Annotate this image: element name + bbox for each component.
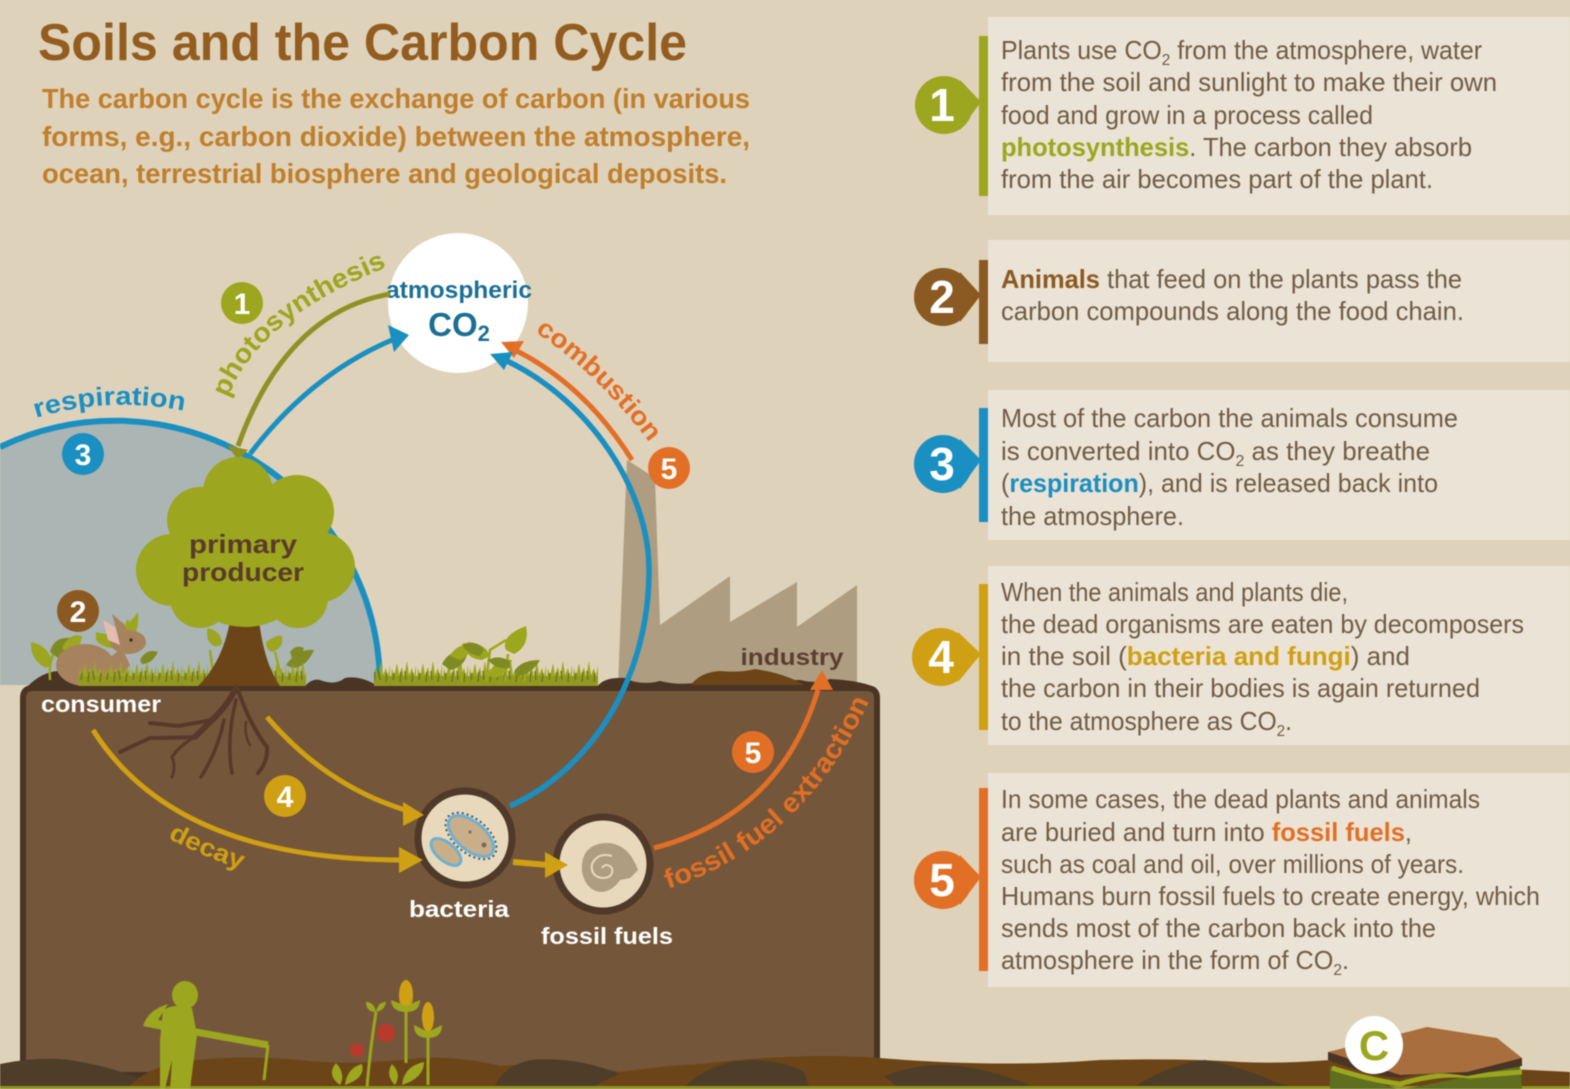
small badge 5 combustion [648,447,690,489]
badge 5 [914,851,981,909]
grass right [374,658,598,686]
text 1: photosynthesis. The carbon they absorb [1001,132,1472,162]
text 5: 2 [1333,962,1342,979]
label: photosynthesis: photosynthesis [215,255,386,399]
small badge 5 combustion: 5 [661,453,677,486]
text 3: (respiration), and is released back into [1001,468,1438,498]
arrow: decay upper [267,717,424,826]
badge 3: 3 [929,438,955,490]
icon: bacteria [418,791,512,885]
text 1: food and grow in a process called [1001,100,1373,130]
small badge 4 [264,775,306,817]
text 3: the atmosphere. [1001,501,1184,531]
icon: soil C block [1328,1016,1522,1089]
arrow: combustion [501,341,632,460]
small badge 1 [221,282,263,324]
intro text: ocean, terrestrial biosphere and geological deposits. [42,158,727,189]
icon: farmer [143,981,268,1089]
panel 2: animals [914,240,1570,362]
text 4: the dead organisms are eaten by decomposers [1001,609,1524,639]
text 4: to the atmosphere as CO [1001,706,1291,736]
arrow: fossil fuel extraction [654,670,833,848]
text 3: Most of the carbon the animals consume [1001,403,1458,433]
text 5: sends most of the carbon back into the [1001,913,1436,943]
text 4: When the animals and plants die, [1001,577,1348,607]
icon: crops [332,980,442,1087]
small badge 5 extraction: 5 [745,737,761,770]
text 5 [1001,784,1540,979]
icon: roots [120,688,267,777]
arrow: plant respiration to atmosphere [250,325,409,454]
icon: tree primary producer: producer [182,557,304,587]
atmospheric CO2 circle [386,233,532,373]
small badge 3 [62,433,104,475]
badge 1 [915,76,981,134]
small badge 5 extraction [732,731,774,773]
title: Soils and the Carbon Cycle [38,14,687,72]
panel 4: decay [912,566,1570,745]
text 3: as they breathe [1244,436,1430,466]
badge 3 [914,435,981,493]
panel 3: respiration [914,390,1570,540]
grass left [78,658,306,686]
text 1: from the air becomes part of the plant. [1001,164,1433,194]
badge 5: 5 [929,854,955,906]
text 1: 2 [1162,52,1170,69]
small badge 1: 1 [234,288,250,321]
icon: tree primary producer: primary [189,529,298,559]
icon: rabbit consumer [56,614,146,686]
text 5: . [1342,945,1349,975]
arrow: bacteria respiration to atmosphere [490,352,649,806]
label: industry: industry [740,644,844,670]
text 2: Animals that feed on the plants pass the [1001,264,1462,294]
small badge 2: 2 [70,596,86,629]
badge 1: 1 [929,79,955,131]
factory [618,460,857,686]
text 1: Plants use CO [1001,35,1169,65]
text 4: the carbon in their bodies is again returned [1001,673,1480,703]
soil block [23,688,877,1075]
badge 4: 4 [928,631,954,683]
badge 2 [914,268,981,326]
panel 5: fossil fuels [914,773,1570,987]
text 1: from the atmosphere, water [1170,35,1482,65]
label: decay: decay [170,826,246,872]
intro text: The carbon cycle is the exchange of carbon (in various [42,83,750,114]
small badge 4: 4 [277,781,294,814]
text 3: is converted into CO [1001,436,1237,466]
text 5: such as coal and oil, over millions of years. [1001,849,1464,879]
label: bacteria: bacteria [409,896,509,922]
intro text [42,83,750,189]
text 5: In some cases, the dead plants and animals [1001,784,1480,814]
text 1 [1001,35,1497,194]
label: consumer: consumer [41,691,161,717]
bottom ground [0,1056,1570,1089]
text 2 [1001,264,1464,326]
text 4: . [1285,706,1292,736]
badge 2: 2 [929,271,955,323]
label: combustion: combustion [538,322,658,442]
text 5: Humans burn fossil fuels to create energy, which [1001,881,1540,911]
text 5: are buried and turn into fossil fuels, [1001,817,1412,847]
label: respiration: respiration [34,386,185,418]
icon: fossil shell [556,817,650,911]
ground mounds [28,669,872,686]
text 4: in the soil (bacteria and fungi) and [1001,641,1410,671]
label: fossil fuels: fossil fuels [541,923,673,949]
text 1: from the soil and sunlight to make their own [1001,67,1497,97]
label: fossil fuel extraction: fossil fuel extraction [663,698,869,888]
arrow: decay lower [93,730,423,873]
small badge 3: 3 [75,439,91,472]
atmospheric CO2 circle: atmospheric [386,277,532,304]
text 3 [1001,403,1458,531]
atmospheric CO2 circle: 2 [478,321,490,346]
text 4 [1001,577,1524,740]
arrow: bacteria to fossil fuels [513,852,568,878]
text 5: atmosphere in the form of CO [1001,945,1343,975]
text 2: carbon compounds along the food chain. [1001,296,1464,326]
icon: soil C block: C [1359,1022,1389,1069]
respiration dome [0,421,380,685]
plants middle [442,626,540,682]
atmospheric CO2 circle: CO [428,306,478,343]
icon: tree primary producer [136,457,355,686]
panel 1: photosynthesis [915,17,1570,215]
plants left [31,612,314,680]
text 3: 2 [1236,453,1244,470]
badge 4 [912,628,981,686]
intro text: forms, e.g., carbon dioxide) between the atmosphere, [42,121,750,152]
small badge 2 [57,590,99,632]
arrow: photosynthesis [227,294,390,460]
text 4: 2 [1277,723,1285,740]
